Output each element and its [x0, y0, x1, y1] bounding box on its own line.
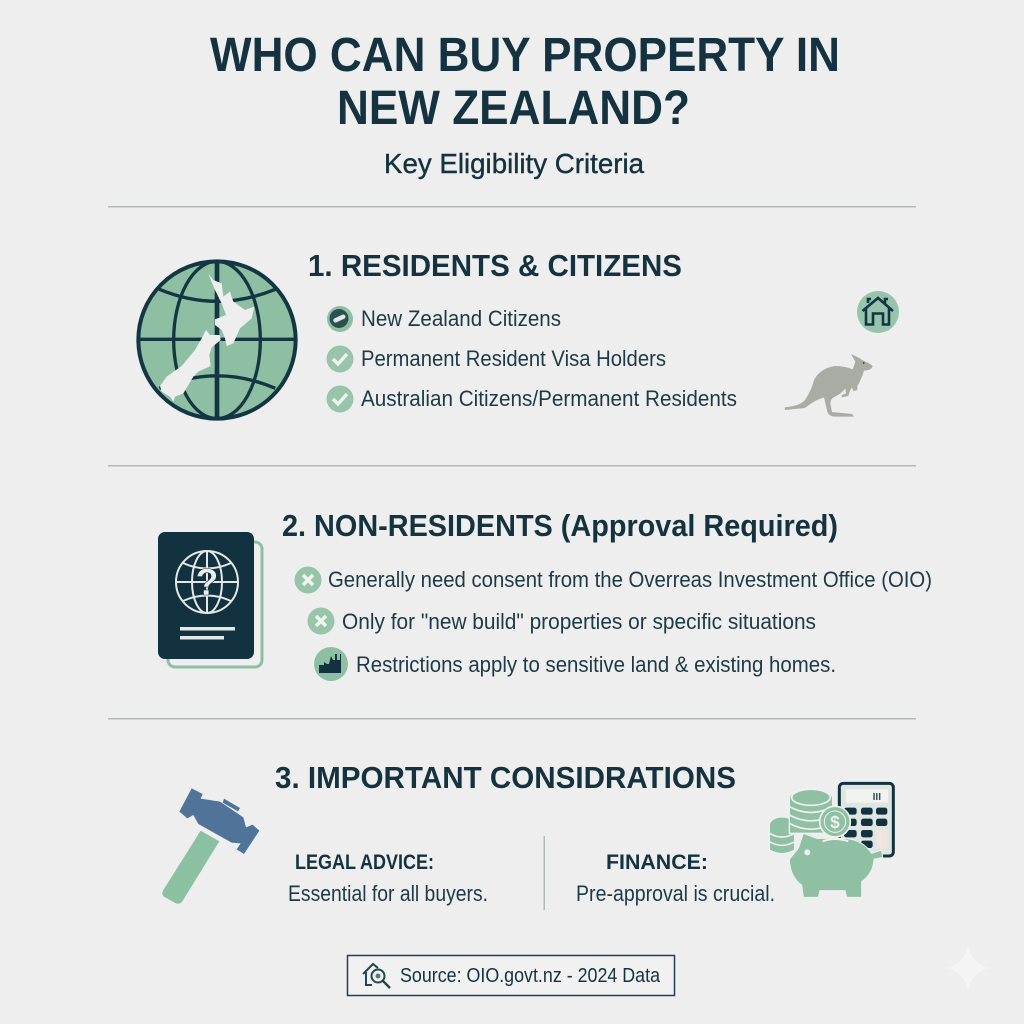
source box: [348, 956, 674, 996]
legal advice: Essential for all buyers.: [288, 881, 488, 906]
icon: cross: [294, 566, 322, 594]
panel: important considerations: [162, 760, 893, 910]
icon: piggy bank, coins and calculator: [769, 783, 893, 897]
icon: globe with New Zealand: [138, 261, 296, 419]
panel: non-residents: [158, 508, 932, 681]
legal advice: [288, 851, 488, 906]
title: WHO CAN BUY PROPERTY IN: [210, 29, 840, 82]
finance: Pre-approval is crucial.: [576, 881, 775, 906]
legal advice: LEGAL ADVICE:: [295, 851, 434, 874]
list item: New Zealand Citizens: [361, 306, 561, 331]
title: NEW ZEALAND?: [337, 82, 690, 135]
icon: check: [326, 386, 354, 412]
icon: citizen badge: [327, 306, 353, 332]
finance: FINANCE:: [606, 851, 708, 874]
heading: 3. IMPORTANT CONSIDRATIONS: [275, 760, 736, 795]
icon: hammer: [162, 788, 259, 904]
list item: Restrictions apply to sensitive land & existing homes.: [356, 652, 836, 677]
icon: cross: [308, 608, 334, 634]
icon: house badge: [857, 291, 899, 333]
icon: piggy bank, coins and calculator: $: [830, 812, 840, 832]
icon: passport: ?: [195, 562, 219, 604]
list item: Generally need consent from the Overreas Investment Office (OIO): [328, 567, 932, 592]
icon: piggy bank, coins and calculator: III: [873, 792, 881, 803]
subtitle: Key Eligibility Criteria: [384, 148, 644, 179]
list item: Permanent Resident Visa Holders: [361, 346, 666, 371]
source text: Source: OIO.govt.nz - 2024 Data: [400, 965, 661, 987]
icon: kangaroo: [785, 354, 873, 417]
heading: 1. RESIDENTS & CITIZENS: [308, 248, 682, 283]
list item: Only for "new build" properties or specific situations: [342, 609, 816, 634]
icon: check: [326, 346, 354, 372]
finance: [576, 851, 775, 906]
title: [210, 29, 840, 135]
heading: 2. NON-RESIDENTS (Approval Required): [282, 508, 838, 543]
list item: Australian Citizens/Permanent Residents: [361, 386, 737, 411]
icon: passport: [158, 532, 262, 667]
icon: factory: [314, 647, 348, 681]
panel: residents and citizens: [138, 248, 899, 419]
icon: house with magnifier: [363, 964, 390, 988]
icon: sparkle watermark: [945, 945, 991, 991]
